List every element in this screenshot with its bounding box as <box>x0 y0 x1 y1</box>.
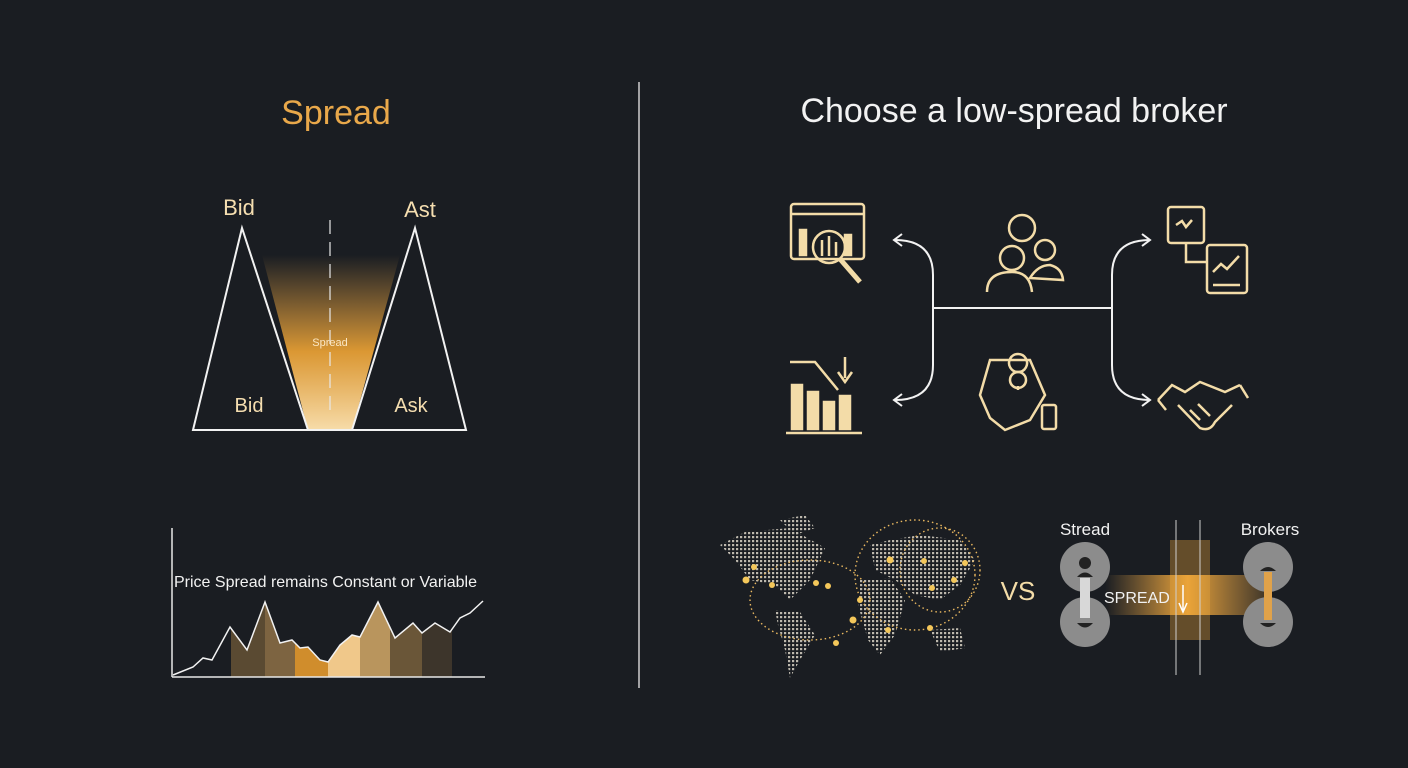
title: Spread: Spread <box>281 94 391 132</box>
label: Bid top: Bid <box>223 195 255 220</box>
title: Choose a low-spread broker: Choose a low-spread broker <box>800 92 1228 130</box>
chart caption: Price Spread remains Constant or Variable <box>174 574 477 591</box>
icon: documents with charts <box>1168 207 1247 293</box>
text: VS: VS <box>1001 576 1035 606</box>
spread glow <box>262 255 400 430</box>
label: Bid: Bid <box>235 395 263 417</box>
chart: price spread <box>172 528 485 680</box>
triangle: bid <box>193 228 308 430</box>
icon: people <box>987 215 1063 292</box>
icon: head with location <box>980 354 1056 430</box>
icon: chart analysis <box>791 204 864 282</box>
label: Brokers: Brokers <box>1241 520 1299 539</box>
connectors <box>894 234 1150 406</box>
comparison: spread vs brokers <box>1060 520 1299 675</box>
icon: declining bars <box>786 357 862 433</box>
label: Spread: Spread <box>312 337 348 349</box>
divider <box>638 82 640 688</box>
label: Ast: Ast <box>404 197 436 222</box>
comparison: spread vs brokers: SPREAD <box>1104 590 1170 607</box>
label: Ask: Ask <box>394 395 429 417</box>
label: Stread: Stread <box>1060 520 1110 539</box>
triangle: ask <box>352 228 466 430</box>
world map <box>720 515 980 678</box>
icon: handshake <box>1158 382 1248 429</box>
diagram: bid ask spread <box>193 195 466 430</box>
